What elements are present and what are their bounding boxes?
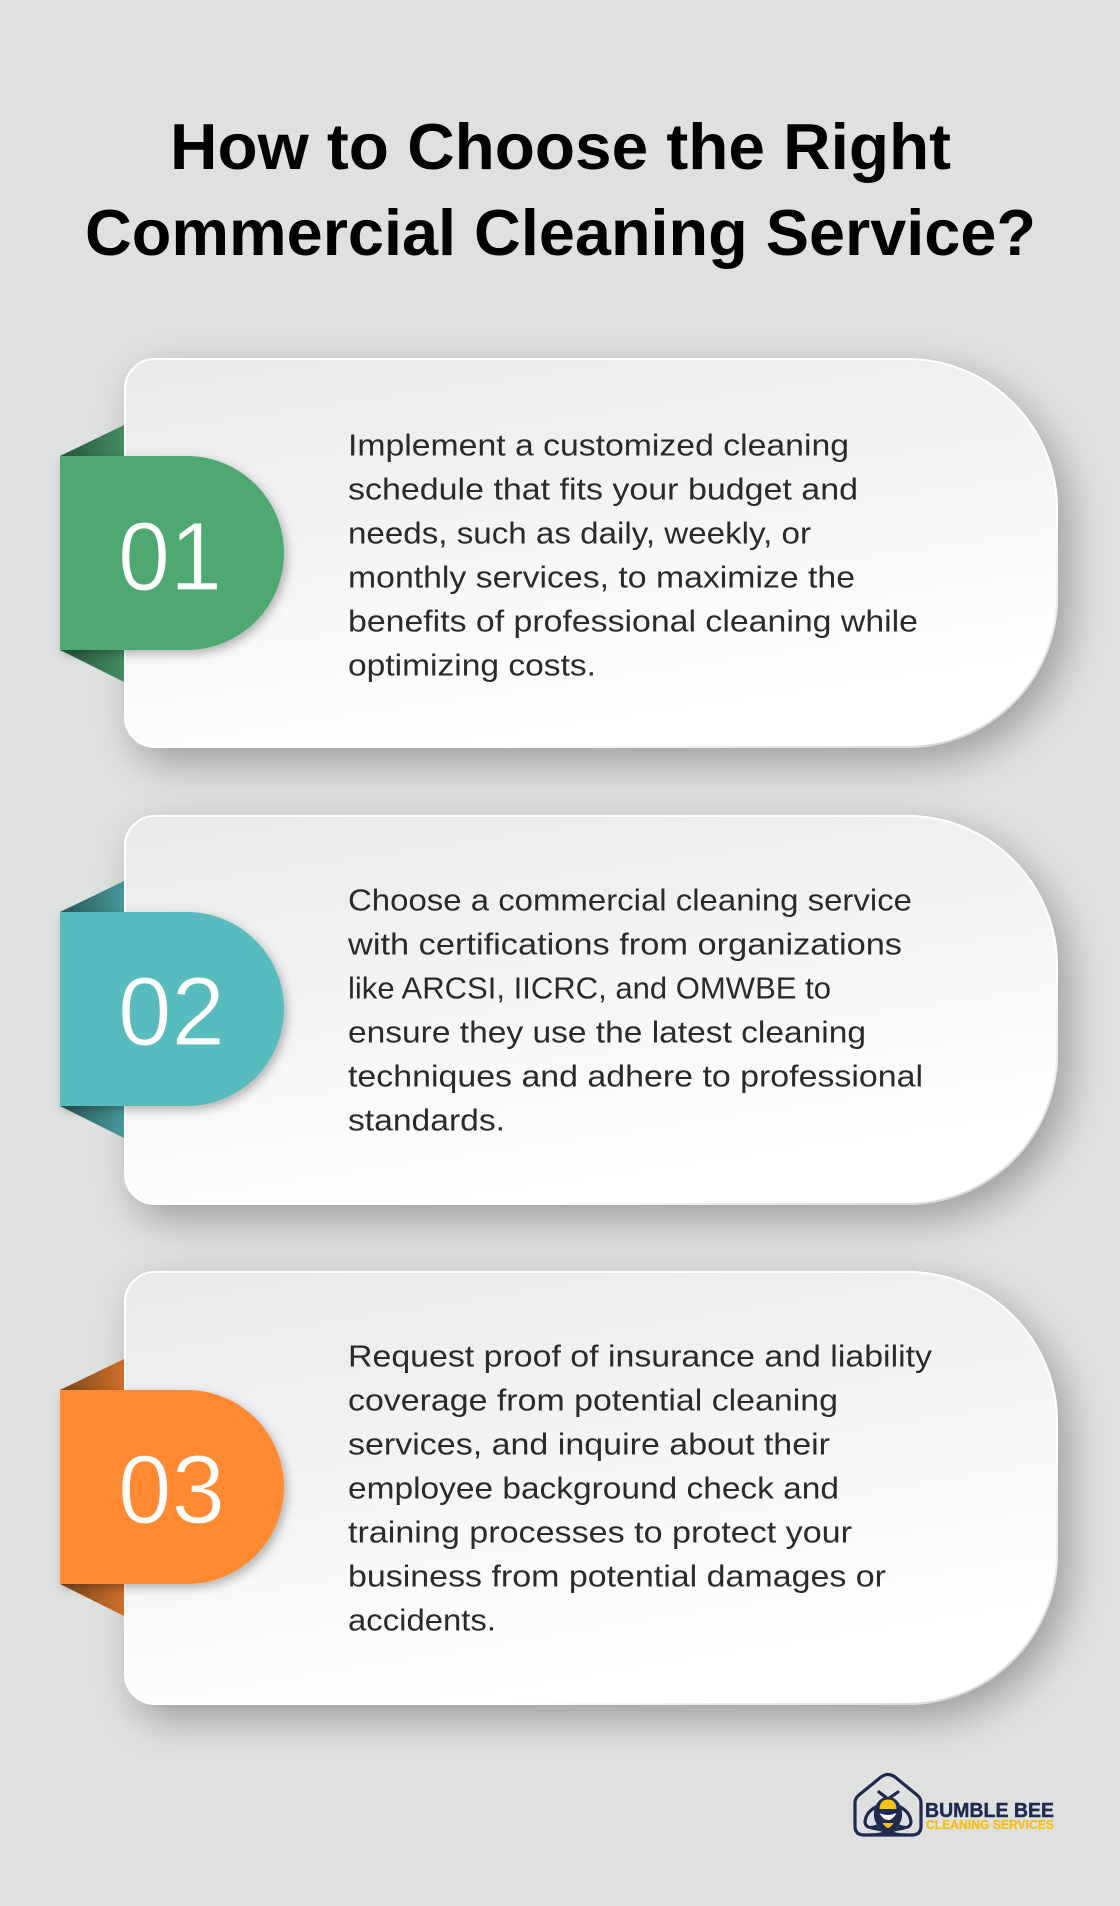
text 2 [347, 884, 923, 1138]
text 1: monthly services, to maximize the [348, 560, 855, 594]
number badge 03 [60, 1390, 284, 1584]
text 2: with certifications from organizations [347, 928, 902, 962]
icon: house outline with bee [855, 1774, 921, 1835]
text 1: benefits of professional cleaning while [348, 604, 918, 638]
text 3: services, and inquire about their [348, 1428, 830, 1462]
text 1: needs, such as daily, weekly, or [348, 516, 811, 550]
number badge 02: 02 [118, 957, 225, 1066]
card 2 [125, 816, 1057, 1204]
number badge 01 [60, 456, 284, 650]
panel: step 1 [60, 359, 1057, 747]
text 2: standards. [348, 1104, 505, 1138]
ribbon fold bottom 1 [60, 650, 124, 682]
title: How to Choose the Right [170, 110, 951, 183]
text 3: accidents. [348, 1604, 496, 1638]
number badge 01: 01 [118, 502, 222, 611]
text 1: optimizing costs. [348, 648, 596, 682]
text 3: business from potential damages or [348, 1560, 886, 1594]
card 3 [125, 1272, 1057, 1704]
text 2: ensure they use the latest cleaning [348, 1016, 866, 1050]
text 3: Request proof of insurance and liability [348, 1340, 933, 1374]
text 3: training processes to protect your [348, 1516, 852, 1550]
text 2: like ARCSI, IICRC, and OMWBE to [348, 972, 831, 1006]
logo tagline: CLEANING SERVICES [926, 1818, 1054, 1832]
title [85, 110, 1036, 269]
ribbon fold top 1 [60, 425, 124, 456]
logo wordmark: BUMBLE BEE [925, 1800, 1054, 1822]
text 3 [348, 1340, 933, 1638]
logo: Bumble Bee Cleaning Services [855, 1774, 1054, 1835]
number badge 02 [60, 912, 284, 1106]
text 1: schedule that fits your budget and [348, 472, 858, 506]
text 2: techniques and adhere to professional [348, 1060, 923, 1094]
text 2: Choose a commercial cleaning service [348, 884, 912, 918]
ribbon fold bottom 2 [60, 1106, 124, 1138]
panel: step 3 [60, 1272, 1057, 1704]
text 1: Implement a customized cleaning [348, 428, 849, 462]
card 1 [125, 359, 1057, 747]
ribbon fold bottom 3 [60, 1584, 124, 1616]
title: Commercial Cleaning Service? [85, 196, 1036, 269]
text 3: coverage from potential cleaning [348, 1384, 838, 1418]
number badge 03: 03 [118, 1435, 225, 1544]
panel: step 2 [60, 816, 1057, 1204]
ribbon fold top 2 [60, 881, 124, 912]
text 3: employee background check and [348, 1472, 839, 1506]
text 1 [348, 428, 918, 682]
ribbon fold top 3 [60, 1359, 124, 1390]
